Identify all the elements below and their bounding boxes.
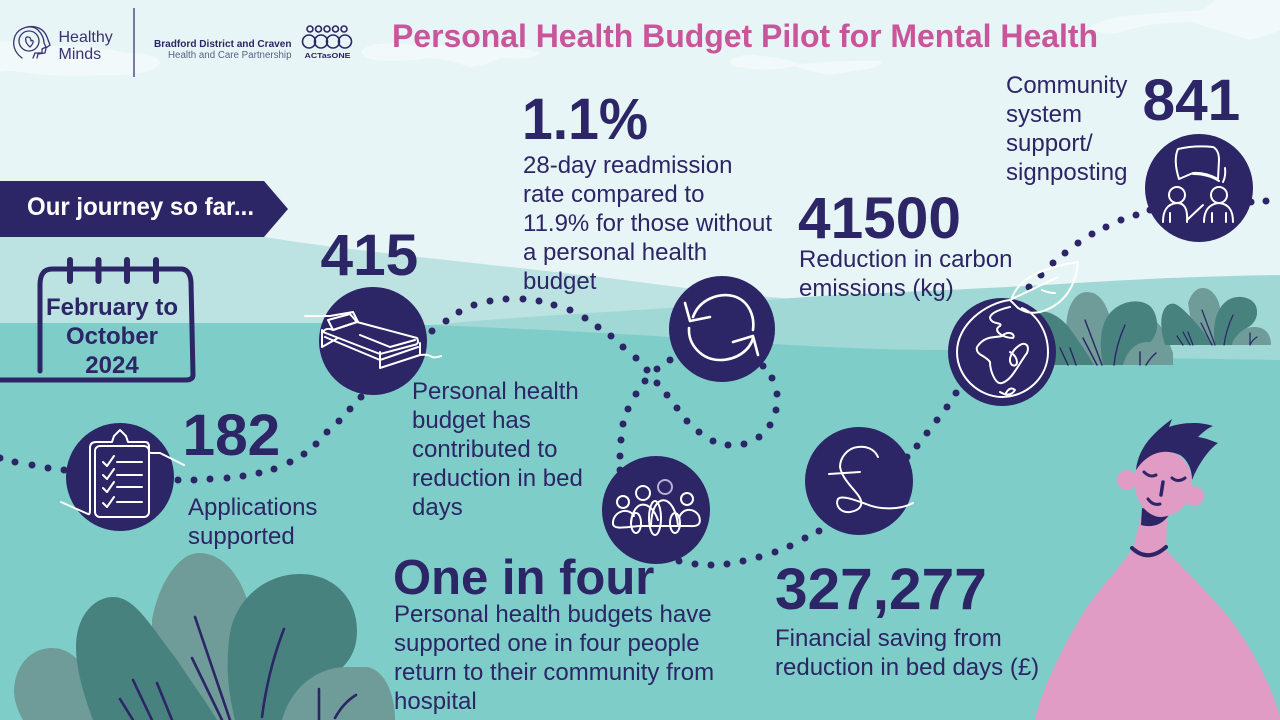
text: Healthy Minds [58, 29, 113, 63]
head [1117, 452, 1204, 517]
bush: bottom left [14, 553, 395, 720]
step: one in four [393, 456, 714, 715]
label: community support: system [1006, 101, 1082, 128]
value: 41500: 41500 [798, 186, 961, 251]
calendar dates: 2024 [85, 352, 139, 379]
calendar [0, 260, 193, 380]
logo: Bradford District and Craven Health and Care Partnership: Health and Care Partnership [168, 50, 292, 61]
illustration: woman in pink dress [1035, 419, 1280, 720]
icon: head outline [14, 26, 50, 58]
label: carbon reduction: emissions (kg) [799, 275, 954, 302]
icon: calendar frame [0, 269, 193, 380]
logo: Healthy Minds [14, 26, 113, 63]
label: community support: signposting [1006, 159, 1127, 186]
label: bed days: budget has [412, 407, 531, 434]
label: community support: Community [1006, 72, 1127, 99]
face details [1144, 472, 1185, 504]
calendar rings [70, 260, 156, 281]
label: one in four: Personal health budgets have [394, 601, 712, 628]
icon: clipboard [61, 423, 184, 531]
label: one in four [394, 601, 714, 715]
step: financial saving [775, 427, 1039, 681]
step: readmission rate [522, 87, 775, 382]
necklace [1132, 547, 1166, 555]
label: one in four: return to their community from [394, 659, 714, 686]
text: Healthy Minds: Healthy [58, 29, 113, 46]
bushes: right [1040, 288, 1271, 365]
step: carbon reduction [798, 186, 1078, 406]
journey dotted path [0, 201, 1266, 565]
title: Personal Health Budget Pilot for Mental Health [392, 18, 1098, 54]
label: applications supported: Applications [188, 494, 317, 521]
label: financial saving [775, 625, 1039, 681]
text: Healthy Minds: Minds [58, 46, 101, 63]
icon: cycle arrows [669, 276, 775, 382]
hair [1136, 419, 1218, 480]
label: bed days: reduction in bed [412, 465, 583, 492]
step: bed days [305, 223, 583, 521]
clouds [0, 0, 1280, 76]
divider line [133, 8, 135, 77]
value: 1.1%: 1.1% [522, 87, 648, 152]
bush group one [1040, 292, 1173, 365]
label: one in four: supported one in four people [394, 630, 700, 657]
calendar dates: October [66, 323, 158, 350]
label: readmission rate [523, 152, 772, 295]
calendar dates: February to [46, 294, 178, 321]
logo: Bradford District and Craven Health and Care Partnership: Bradford District and Craven [154, 39, 292, 50]
label: bed days: Personal health [412, 378, 579, 405]
label: applications supported: supported [188, 523, 295, 550]
logo: ACTasONE [302, 26, 352, 60]
label: one in four: hospital [394, 688, 477, 715]
value: One in four: One in four [393, 551, 654, 605]
label: applications supported [188, 494, 317, 550]
step: community support [1006, 68, 1253, 242]
label: carbon reduction: Reduction in carbon [799, 246, 1012, 273]
label: readmission rate: rate compared to [523, 181, 704, 208]
banner: Our journey so far: Our journey so far... [27, 193, 254, 221]
value: 415: 415 [320, 223, 418, 288]
label: community support: support/ [1006, 130, 1093, 157]
label: bed days: contributed to [412, 436, 557, 463]
icon: two people talking [1145, 134, 1253, 242]
value: 327,277: 327,277 [775, 557, 987, 622]
bush group two [1161, 288, 1271, 345]
logo: Bradford District and Craven Health and Care Partnership [154, 39, 292, 61]
dress [1035, 513, 1280, 720]
label: readmission rate: 11.9% for those without [523, 210, 772, 237]
icon: bed [305, 287, 441, 395]
label: readmission rate: a personal health [523, 239, 707, 266]
label: readmission rate: budget [523, 268, 597, 295]
logo: ACTasONE: ACTasONE [304, 51, 350, 60]
label: community support [1006, 72, 1127, 186]
label: readmission rate: 28-day readmission [523, 152, 732, 179]
label: carbon reduction [799, 246, 1012, 302]
hills [0, 235, 1280, 720]
label: bed days: days [412, 494, 463, 521]
label: financial saving: Financial saving from [775, 625, 1002, 652]
value: 182: 182 [182, 403, 280, 468]
label: bed days [412, 378, 583, 521]
value: 841: 841 [1142, 68, 1240, 133]
label: financial saving: reduction in bed days (£) [775, 654, 1039, 681]
icon: group of people [602, 456, 710, 564]
banner: Our journey so far [0, 181, 288, 237]
chin shadow [1141, 508, 1169, 526]
step: applications supported [61, 403, 317, 550]
icon: pound sign [805, 427, 913, 535]
calendar dates [46, 294, 178, 379]
icon: globe with leaf [948, 262, 1078, 406]
